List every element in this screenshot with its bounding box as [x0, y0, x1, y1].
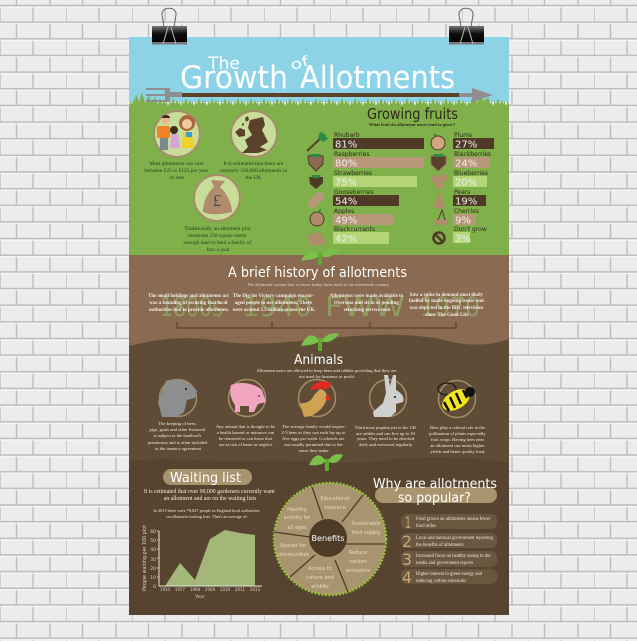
- bar: blackberries: [453, 151, 491, 170]
- binder clip right: [449, 8, 484, 44]
- text: history 2: The Dig for Victory campaign encour-: [233, 294, 314, 299]
- icon: money sack: [194, 175, 240, 221]
- text: history 3: Overseas and sit-in of pending: [334, 301, 399, 306]
- bar: apples: 49%: [335, 216, 357, 226]
- label: sustainable food supply: food supply: [351, 530, 381, 536]
- text: pig keeping: Any animal that is thought to be: [216, 424, 275, 429]
- bar: strawberries: 75%: [335, 178, 357, 188]
- bar: blackberries: Blackberries: [454, 151, 491, 158]
- icon: cherries: [434, 210, 448, 226]
- text: history 1: authorities had to provide allotments.: [149, 308, 230, 313]
- label: sustainable food supply: Sustainable: [351, 521, 381, 527]
- icon: garden fork: [146, 88, 493, 102]
- bar: blueberries: 20%: [455, 178, 477, 188]
- area chart: 10: [150, 575, 156, 581]
- label: educational resource: resource: [324, 505, 346, 511]
- text: plot size: Traditionally an allotment plot: [184, 226, 251, 232]
- bar: raspberries: Raspberries: [334, 151, 369, 158]
- text: chicken keeping: not usually permitted due to the: [284, 442, 343, 447]
- icon: bee: [438, 380, 476, 418]
- text: allotment count: currently 330,000 allotments in: [219, 168, 287, 174]
- area chart: 1910: [160, 587, 171, 592]
- label: access to nature: wildlife: [311, 584, 329, 590]
- label: educational resource: Educational: [320, 496, 350, 502]
- title: Allotments: [300, 60, 455, 96]
- watermark years: 1800s: [160, 292, 223, 323]
- area chart: 1998: [190, 587, 201, 592]
- watermark years: 1940: [242, 292, 312, 323]
- bar: pears: Pears: [454, 189, 470, 196]
- text: history 4: fuelled by made ongoing issues and: [409, 299, 484, 304]
- bar: plums: [453, 132, 494, 150]
- label: spaces for communities: Spaces for: [280, 543, 307, 549]
- label: spaces for communities: communities: [277, 552, 310, 558]
- bar: gooseberries: 54%: [335, 196, 357, 208]
- icon: blackcurrants: [307, 232, 325, 246]
- text: bee keeping: fruit crops. Having bees near: [431, 437, 484, 442]
- bar: plums: 27%: [455, 140, 477, 150]
- icon: no symbol: [434, 232, 444, 244]
- panel: sky: [129, 37, 509, 102]
- icon: raspberry: [308, 154, 323, 171]
- text: pig keeping: a health hazard or nuisance can: [217, 430, 275, 435]
- bar: raspberries: 80%: [335, 158, 357, 170]
- text: bee keeping: an allotment can mean higher: [430, 443, 485, 448]
- text: history 2: were around 1.5 million across the UK.: [232, 308, 316, 313]
- bar: cherries: 9%: [455, 216, 471, 226]
- bar: apples: Apples: [334, 208, 354, 215]
- text: plot size: measures 250 square metre: [188, 233, 247, 239]
- watermark years: 1970: [420, 292, 480, 323]
- icon: gooseberries: [308, 192, 324, 208]
- title: Growth: [180, 60, 288, 96]
- list item 1: Food grown on allotments means fewer: [416, 517, 491, 522]
- heading: brief history: A brief history of allotments: [228, 265, 407, 281]
- icon: apple: [310, 209, 324, 226]
- text: history intro: The allotment system that we have today dates back to the nineteenth century: [247, 282, 390, 287]
- heading: growing fruits: Growing fruits: [367, 105, 458, 123]
- text: chicken keeping: noise they make.: [298, 448, 330, 453]
- area chart: 60: [150, 529, 156, 535]
- text: allotment count: the UK.: [245, 175, 263, 181]
- area chart: 40: [150, 547, 156, 553]
- heading: waiting list: Waiting list: [170, 471, 241, 486]
- text: history 4: show The Good Life: [425, 313, 469, 318]
- text: plot size: enough land to feed a family of: [183, 239, 251, 246]
- bar: strawberries: [333, 170, 417, 188]
- text: rabbit keeping: Third most popular pet in the UK: [355, 425, 417, 430]
- text: animals intro: Allotment users are allowed to keep hens and rabbits providing that they are: [256, 368, 396, 373]
- grass edge: [129, 92, 509, 107]
- icon: money sack: £: [213, 191, 221, 210]
- benefits wheel: Benefits: [312, 534, 344, 543]
- area chart: 30: [150, 557, 156, 563]
- icon: rabbit: [370, 375, 406, 417]
- bar: raspberries: [333, 151, 424, 170]
- sprout 3: [309, 454, 343, 471]
- text: waiting list intro: an allotment and are on the waiting lists: [164, 496, 257, 502]
- list item 2: [401, 532, 497, 551]
- list item 3: [401, 550, 497, 569]
- bar: blueberries: [453, 170, 488, 188]
- text: chicken keeping: five eggs per week. Cockerels are: [282, 436, 344, 441]
- bar: apples: [333, 208, 394, 226]
- list item 2: the benefits of allotments: [416, 543, 464, 548]
- area chart: 20: [150, 566, 156, 572]
- bar: gooseberries: Gooseberries: [334, 189, 374, 196]
- area chart: 2009: [205, 587, 216, 592]
- area chart: 50: [150, 538, 156, 544]
- bar: pears: 19%: [455, 196, 477, 208]
- icon: pear: [433, 191, 445, 208]
- text: rabbit keeping: are rabbits and can live up to 10: [356, 431, 416, 436]
- text: pig keeping: be removed or can those that: [219, 436, 273, 441]
- list item 4: [401, 568, 497, 587]
- text: history 4: Saw a spike in demand most likely: [410, 293, 484, 298]
- benefits wheel: [274, 483, 386, 595]
- text: goat keeping: permission and is often included: [148, 440, 208, 445]
- text: waiting list detail: on allotment waiting lists. That's an average of:: [166, 514, 248, 519]
- text: bee keeping: pollination of plants especially: [429, 431, 486, 436]
- title: [180, 53, 455, 96]
- text: allotment cost: to rent: [170, 175, 184, 181]
- text: rabbit keeping: years. They need to be checked: [357, 436, 415, 441]
- watermark years: FWW: [325, 292, 405, 323]
- list item 3: Increased focus on healthy eating in the: [416, 554, 490, 559]
- label: reduce carbon emissions: Reduce: [349, 550, 367, 556]
- panel: dark soil: [129, 335, 509, 470]
- label: healthy activity: Healthy: [287, 507, 307, 513]
- area chart: 2010: [220, 587, 231, 592]
- bar: gooseberries: [333, 189, 399, 208]
- list item 1: [401, 513, 497, 532]
- text: fruit subheading: What fruit do allotment users tend to grow?: [369, 122, 456, 127]
- bar: don't grow: [453, 226, 487, 245]
- text: goat keeping: pigs, goats and other livestock: [150, 427, 206, 433]
- area chart: 1977: [175, 587, 186, 592]
- list item 3: media and government reports: [416, 561, 473, 566]
- icon: plum: [431, 134, 445, 150]
- title: of: [289, 53, 312, 74]
- text: history 1: The small holdings and allotments act: [148, 294, 229, 299]
- area chart: People waiting per 100 plot: [142, 525, 148, 591]
- area chart: 2011: [235, 587, 246, 592]
- text: animals intro: not used for business or profit.: [299, 374, 355, 379]
- text: plot size: four a year: [206, 246, 230, 253]
- text: chicken keeping: The average family would require: [282, 424, 345, 429]
- label: access to nature: Access to: [308, 566, 332, 572]
- icon: uk map: [231, 111, 277, 157]
- label: reduce carbon emissions: carbon: [349, 559, 367, 565]
- list item 4: 4: [402, 568, 412, 587]
- icon: blueberries: [431, 174, 447, 189]
- text: chicken keeping: 2-3 hens as they can each lay up to: [281, 430, 346, 435]
- label: healthy activity: activity for: [284, 515, 311, 521]
- area chart: 0: [153, 584, 156, 590]
- icon: family: [154, 111, 200, 157]
- text: bee keeping: Bees play a critical role in the: [430, 425, 485, 430]
- bar: pears: [453, 189, 486, 208]
- list item 2: Local and national government reporting: [416, 536, 493, 541]
- panel: darkest soil: [129, 457, 509, 615]
- text: history 2: aged people to use allotments. There: [235, 301, 313, 306]
- bar: blackberries: 24%: [455, 158, 477, 170]
- sprout 2: [301, 333, 339, 351]
- bar: don't grow: 3%: [455, 234, 471, 245]
- text: waiting list intro: It is estimated that over 90,000 gardeners currently want: [144, 489, 275, 495]
- panel: green fruit section: [129, 106, 509, 256]
- sprout 1: [301, 249, 339, 265]
- bar: don't grow: Don't grow: [454, 226, 487, 233]
- text: goat keeping: is subject to the landlord's: [154, 433, 202, 438]
- list item 4: reducing carbon emissions: [416, 579, 466, 584]
- text: goat keeping: The keeping of bees,: [158, 421, 197, 427]
- heading: why are allotments so popular: Why are allotments: [373, 477, 497, 492]
- bar: rhubarb: 81%: [335, 140, 357, 150]
- list item 1: 1: [405, 513, 411, 532]
- icon: rhubarb: [307, 132, 328, 151]
- icon: blackberry: [431, 154, 446, 171]
- heading: why are allotments so popular: [373, 477, 497, 506]
- text: allotment cost: Most allotments can cost: [149, 161, 204, 167]
- bar: blueberries: Blueberries: [454, 170, 488, 177]
- area chart: 2013: [250, 587, 261, 592]
- text: history 3: Allotments were made available to: [330, 294, 404, 299]
- text: allotment cost: between £25 to £125 per year: [144, 168, 208, 174]
- icon: strawberry: [309, 175, 323, 189]
- bar: strawberries: Strawberries: [334, 170, 372, 177]
- area chart: [142, 525, 262, 600]
- heading: animals: Animals: [294, 353, 343, 368]
- text: history 1: was a founding of securing that local: [149, 301, 228, 306]
- fruit chart left column: [333, 132, 424, 245]
- icon: chicken: [298, 380, 336, 417]
- bar: blackcurrants: [333, 226, 389, 245]
- bar: plums: Plums: [454, 132, 472, 139]
- panel: light soil: [129, 255, 509, 350]
- list item 3: 3: [402, 550, 412, 569]
- text: rabbit keeping: daily and exercised regularly.: [359, 442, 413, 447]
- label: reduce carbon emissions: emissions: [346, 568, 371, 574]
- bar: blackcurrants: Blackcurrants: [334, 226, 375, 233]
- bar: cherries: Cherries: [454, 208, 479, 215]
- text: bee keeping: yields and better quality food.: [431, 449, 485, 454]
- heading: why are allotments so popular: so popular?: [398, 491, 471, 506]
- text: allotment count: It is estimated that there are: [223, 161, 284, 167]
- list item 4: Higher interest in green energy and: [416, 572, 483, 577]
- timeline: [177, 322, 456, 328]
- title: The: [207, 54, 240, 74]
- bar: rhubarb: Rhubarb: [334, 132, 360, 139]
- list item 2: 2: [402, 532, 412, 551]
- watermark years: [160, 292, 480, 323]
- bar: cherries: [453, 208, 479, 226]
- label: healthy activity: all ages: [287, 525, 307, 531]
- icon: goat: [158, 379, 197, 417]
- label: access to nature: nature and: [306, 575, 334, 581]
- text: goat keeping: in the tenancy agreement: [155, 446, 202, 451]
- list item 1: food miles: [416, 524, 436, 529]
- area chart: Year: [194, 594, 205, 600]
- bar: rhubarb: [333, 132, 424, 150]
- bar: blackcurrants: 42%: [335, 234, 357, 245]
- fruit chart right column: [453, 132, 494, 245]
- poster: [129, 37, 509, 615]
- text: history 3: returning service men: [344, 308, 391, 313]
- text: pig keeping: are at risk of harm or neglect.: [219, 442, 273, 447]
- text: history 4: was depicted in the BBC television: [410, 306, 483, 311]
- text: waiting list detail: In 2013 there were 78,827 people in England local authorities: [153, 508, 260, 514]
- icon: pig: [228, 380, 266, 416]
- binder clip left: [152, 8, 187, 44]
